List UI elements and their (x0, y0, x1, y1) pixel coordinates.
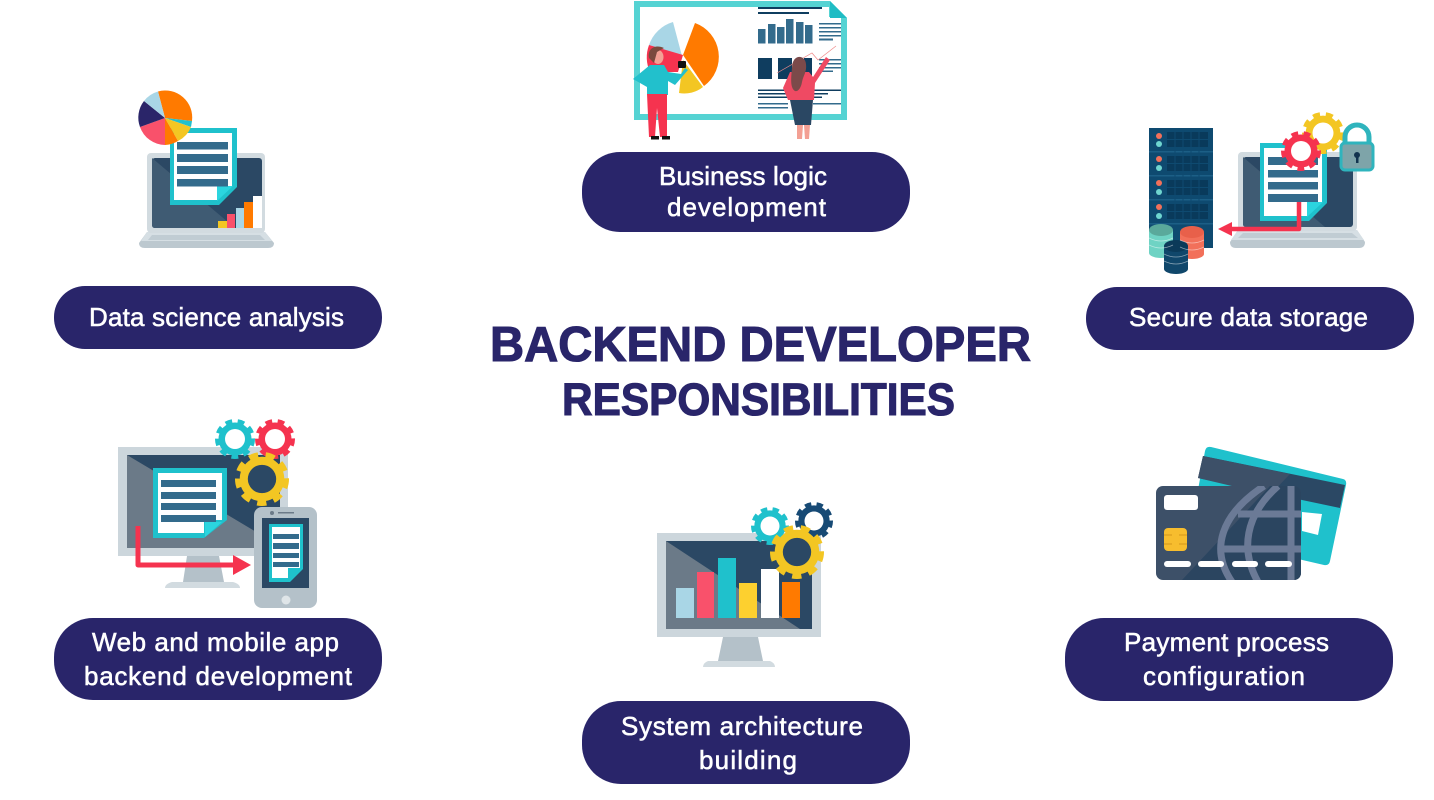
panel: web and mobile app backend development (54, 422, 382, 700)
label pill: Payment process configuration: Payment process (1124, 627, 1329, 657)
panel: payment process configuration (1065, 447, 1393, 701)
panel: data science analysis (54, 91, 382, 349)
label pill: Secure data storage (1086, 287, 1414, 350)
title: BACKEND DEVELOPER (490, 318, 1031, 372)
label pill: System architecture building: building (699, 745, 797, 775)
icon: yellow gear (773, 528, 821, 576)
panel: business logic development (582, 1, 910, 232)
label pill: Web and mobile app backend development (54, 618, 382, 700)
label pill: Data science analysis (54, 286, 382, 349)
label pill: Business logic development (582, 152, 910, 232)
icon: smartphone (254, 507, 317, 608)
label pill: Business logic development: development (667, 192, 827, 222)
arrow: document to server (1218, 202, 1299, 236)
icon: teal gear (218, 422, 252, 456)
icon: laptop with document (1230, 143, 1365, 248)
icon: teal gear (753, 509, 787, 543)
label pill: System architecture building: System architecture (621, 711, 863, 741)
icon: database cylinders (1149, 224, 1204, 274)
panel: secure data storage (1086, 115, 1414, 350)
icon: woman with red top (783, 57, 830, 139)
label pill: Web and mobile app backend development: backend development (84, 661, 353, 691)
back card (1191, 447, 1346, 565)
icon: man with teal shirt (633, 46, 688, 140)
icon: server rack (1149, 128, 1213, 248)
label pill: Payment process configuration: configuration (1143, 661, 1305, 691)
icon: navy gear (797, 504, 831, 538)
icon: laptop with document and pie chart (138, 91, 274, 248)
front card (1156, 486, 1301, 582)
title: RESPONSIBILITIES (562, 374, 955, 425)
title (490, 318, 1031, 425)
icon: credit cards (1156, 447, 1346, 582)
label pill: Secure data storage: Secure data storage (1129, 302, 1368, 332)
label pill: Payment process configuration (1065, 618, 1393, 701)
icon: monitor with bar chart (657, 533, 821, 667)
icon: desktop monitor with document (118, 447, 288, 588)
icon: red gear (258, 422, 292, 456)
icon: presentation board with presenters (633, 1, 847, 140)
icon: yellow gear (238, 455, 286, 503)
icon: yellow gear (1305, 115, 1341, 151)
icon: padlock (1341, 125, 1373, 170)
label pill: System architecture building (582, 701, 910, 784)
arrow: monitor to phone (138, 526, 251, 575)
label pill: Data science analysis: Data science analysis (89, 302, 344, 332)
label pill: Business logic development: Business logic (659, 161, 827, 191)
icon: red gear (1284, 134, 1318, 168)
label pill: Web and mobile app backend development: Web and mobile app (92, 627, 339, 657)
panel: system architecture building (582, 504, 910, 784)
